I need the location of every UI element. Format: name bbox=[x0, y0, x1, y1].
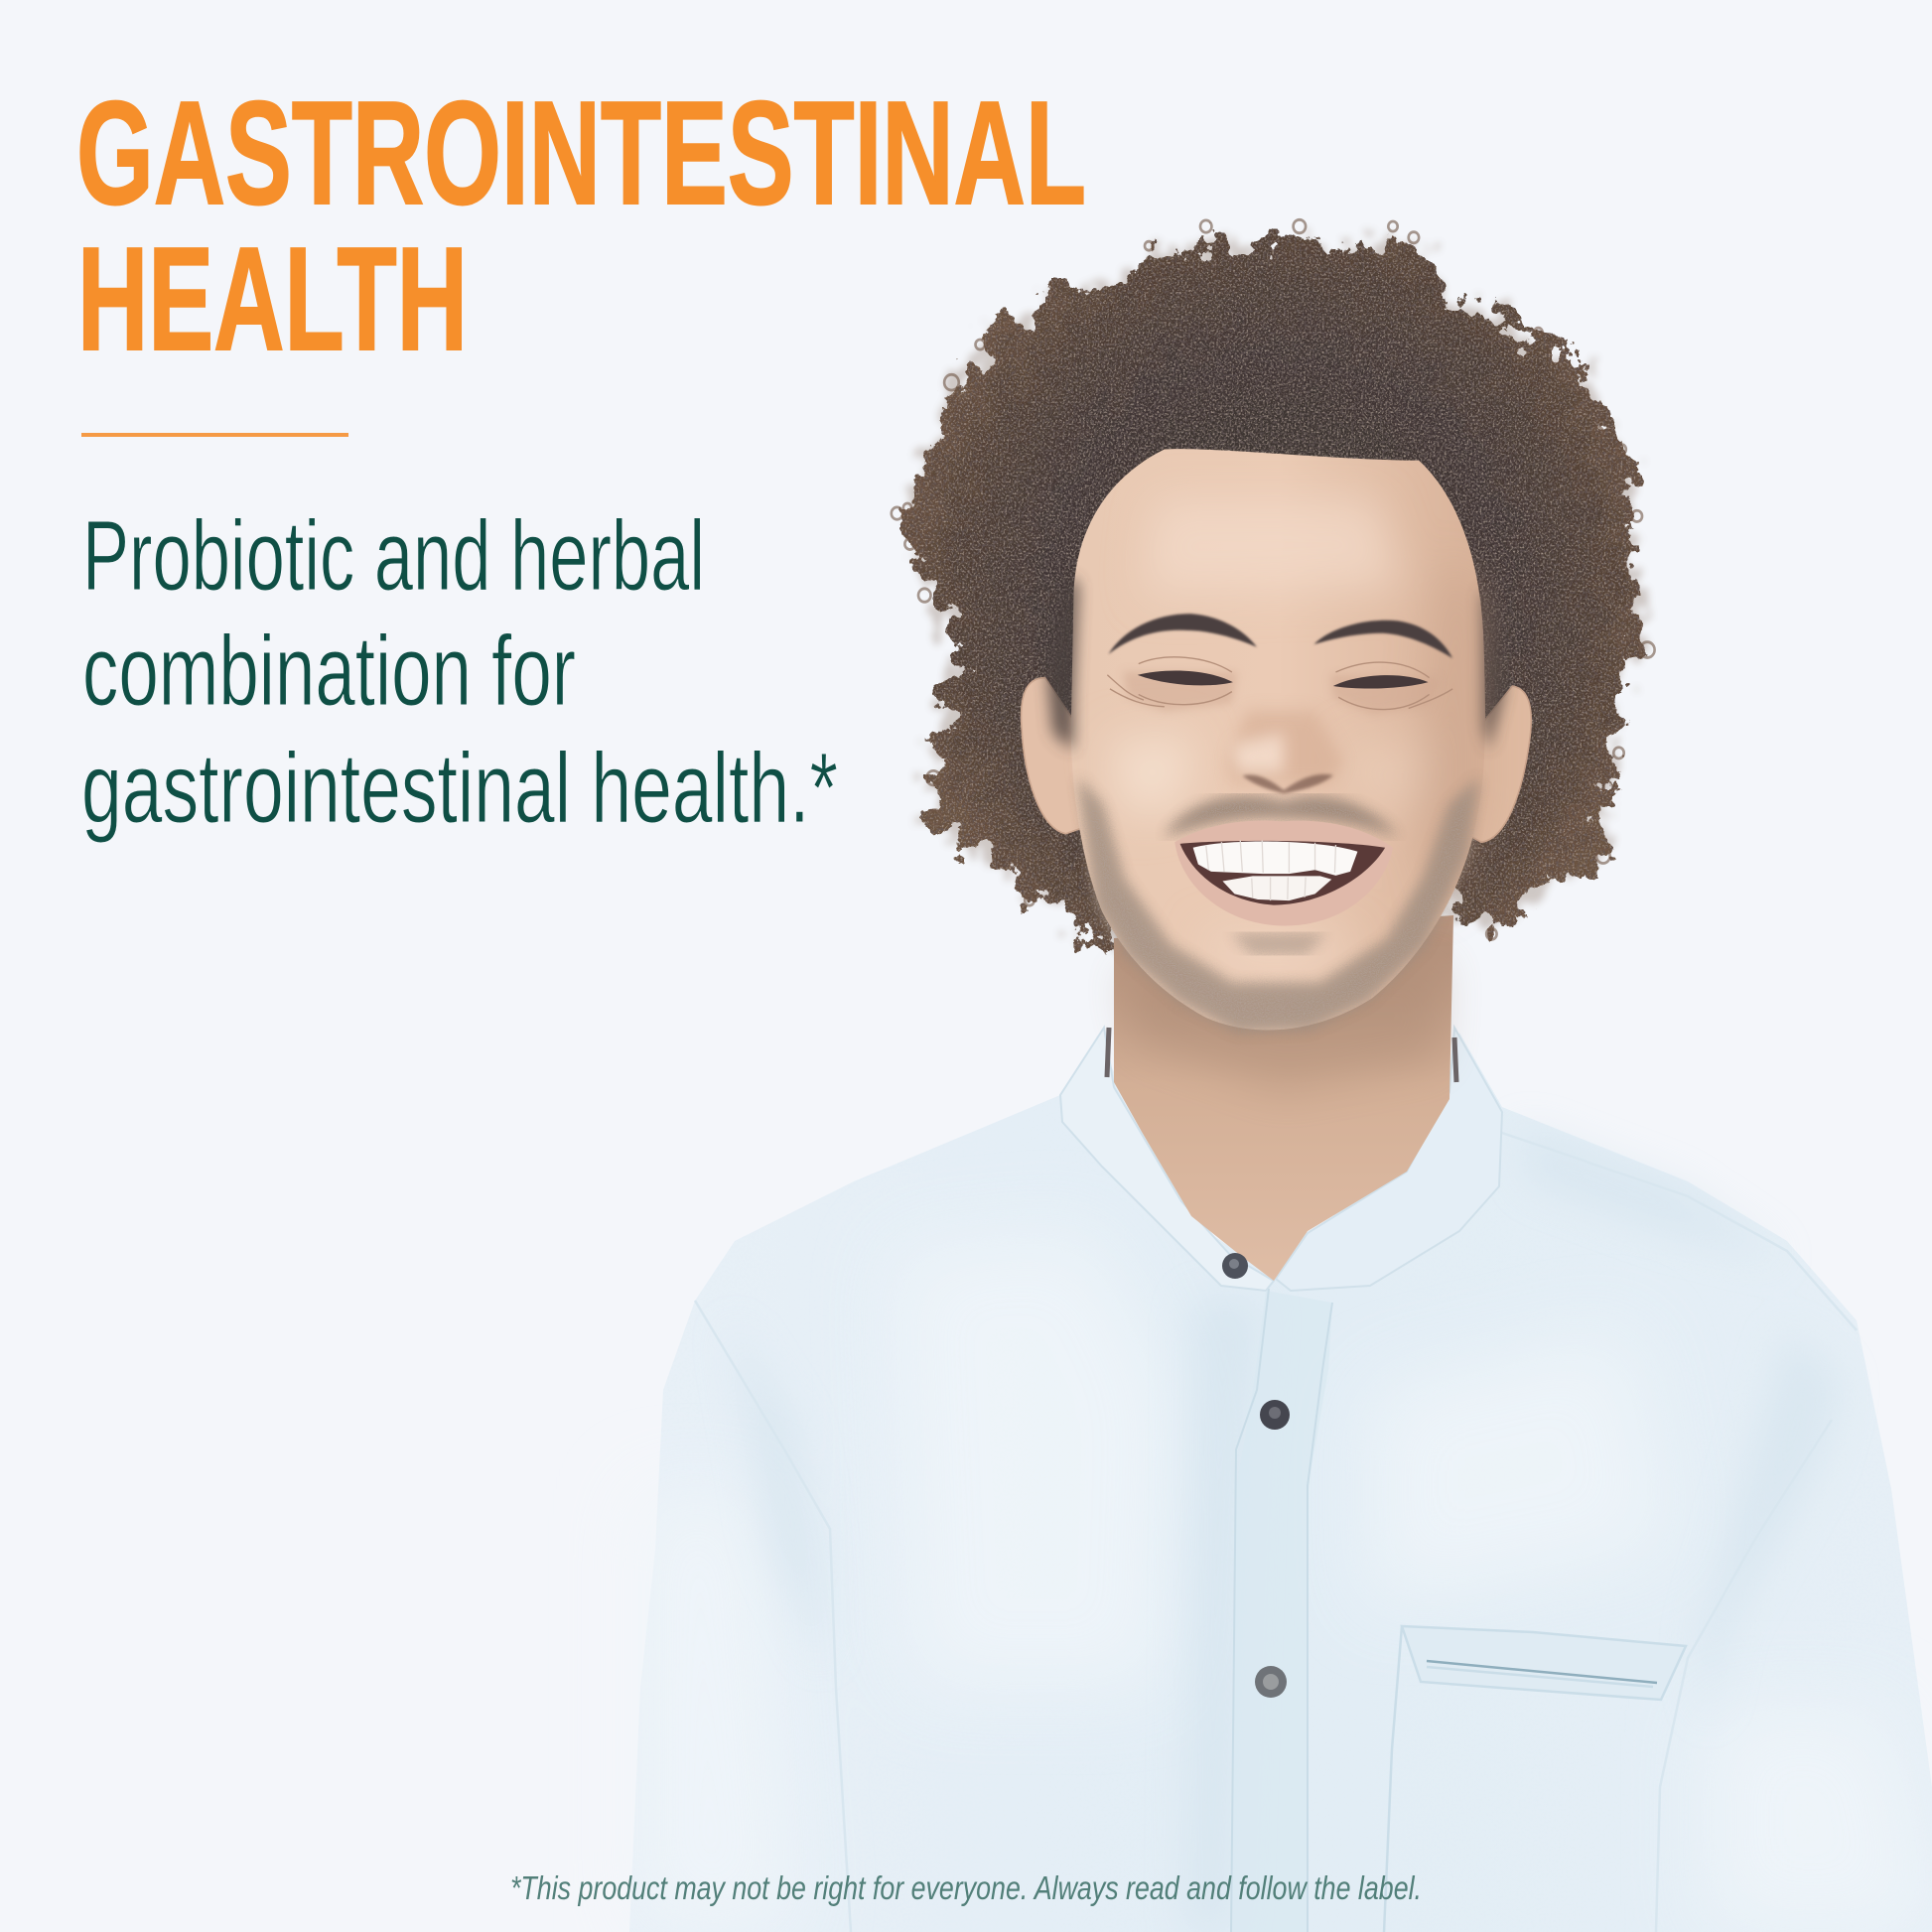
hair mass bbox=[907, 237, 1642, 948]
body text: Probiotic and herbal bbox=[82, 500, 705, 612]
collar inner shadow bbox=[1107, 1028, 1456, 1082]
face bbox=[1071, 449, 1485, 1030]
footnote: *This product may not be right for everyone. Always read and follow the label. bbox=[510, 1869, 1422, 1906]
arm seams bbox=[695, 1132, 1857, 1932]
shirt highlights bbox=[635, 1231, 1932, 1932]
shirt body bbox=[629, 1033, 1932, 1932]
right ear bbox=[1465, 686, 1531, 842]
lips bbox=[1174, 820, 1393, 926]
neck bbox=[1114, 915, 1453, 1281]
title: GASTROINTESTINAL bbox=[76, 71, 1086, 235]
left ear bbox=[1022, 678, 1081, 834]
body text: combination for bbox=[82, 616, 576, 727]
collar bbox=[1060, 1028, 1274, 1291]
teeth bbox=[1193, 841, 1357, 900]
photo: smiling man with curly hair in a pale shirt bbox=[629, 219, 1932, 1932]
title: HEALTH bbox=[77, 217, 468, 381]
eyes bbox=[1107, 657, 1452, 710]
stubble bbox=[1079, 778, 1478, 1032]
eyebrows bbox=[1108, 614, 1452, 658]
body text: gastrointestinal health.* bbox=[81, 733, 838, 844]
moustache bbox=[1165, 797, 1398, 837]
hair curls bbox=[892, 219, 1655, 939]
nose bbox=[1227, 711, 1343, 793]
lower teeth bbox=[1222, 876, 1331, 900]
pocket bbox=[1384, 1626, 1686, 1932]
tooth gaps bbox=[1206, 841, 1335, 900]
hair fuzz bbox=[907, 237, 1642, 948]
body text bbox=[81, 500, 838, 844]
placket bbox=[1231, 1291, 1332, 1932]
shirt shading bbox=[730, 1127, 1842, 1932]
shirt texture bbox=[629, 1033, 1932, 1932]
head bbox=[1022, 449, 1531, 1032]
shirt and neck bbox=[629, 915, 1932, 1932]
face shading bbox=[1107, 499, 1481, 973]
title bbox=[76, 71, 1086, 381]
sideburns bbox=[1047, 578, 1504, 751]
neck shadow bbox=[1122, 963, 1445, 1092]
upper teeth bbox=[1193, 841, 1357, 876]
divider rule bbox=[81, 433, 348, 437]
buttons bbox=[1222, 1253, 1290, 1698]
mouth bbox=[1180, 841, 1385, 905]
eye sockets bbox=[1123, 672, 1440, 714]
hair bbox=[892, 219, 1655, 948]
chin patch bbox=[1232, 934, 1325, 953]
